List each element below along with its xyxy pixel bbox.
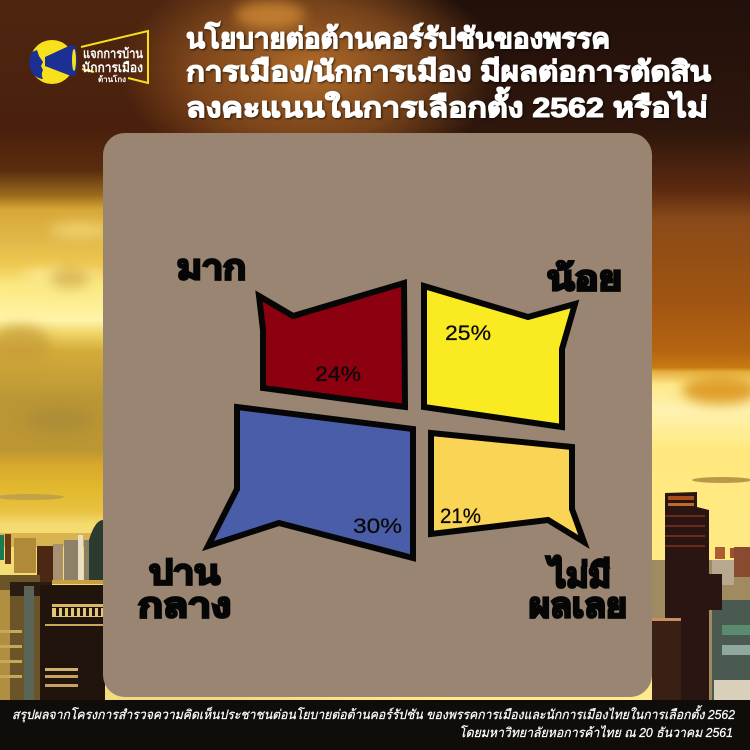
chart: speech-bubble quadrants [208,283,584,558]
value: 25%: 25% [445,322,491,345]
value: 21%: 21% [440,505,481,528]
logo [29,31,148,84]
label: ปานกลาง: กลาง [138,587,231,625]
panel: chart background [103,133,652,697]
logo text line 2: นักการเมือง [82,60,143,75]
logo frame [81,31,148,83]
label: ปานกลาง [138,554,231,625]
label: ไม่มีผลเลย [529,555,627,625]
bubble: blue, ปานกลาง [208,407,413,558]
value: 30%: 30% [353,515,402,538]
label: ไม่มีผลเลย: ผลเลย [529,587,627,625]
footer source text [12,705,736,740]
bubble: light yellow, ไม่มีผลเลย [431,433,584,542]
label: ไม่มีผลเลย: ไม่มี [546,555,611,595]
value: 24%: 24% [315,363,361,386]
logo text line 3: ต้านโกง [98,74,126,84]
title [186,21,711,123]
skyline: right city [652,492,750,700]
icon: yellow circle with face and megaphone [29,40,77,84]
footer band [0,700,750,750]
footer source text: โดยมหาวิทยาลัยหอการค้าไทย ณ 20 ธันวาคม 2561 [459,725,733,740]
skyline: left city [0,520,105,700]
label: น้อย: น้อย [547,260,622,298]
label: มาก: มาก [177,249,246,287]
bubble: red, มาก [259,283,405,407]
logo text line 1: แจกการบ้าน [83,46,143,61]
title: นโยบายต่อต้านคอร์รัปชันของพรรค [186,21,610,54]
bubble: yellow, น้อย [424,286,575,427]
title: การเมือง/นักการเมือง มีผลต่อการตัดสิน [186,56,711,87]
title: ลงคะแนนในการเลือกตั้ง 2562 หรือไม่ [186,86,708,123]
label: ปานกลาง: ปาน [149,554,220,592]
